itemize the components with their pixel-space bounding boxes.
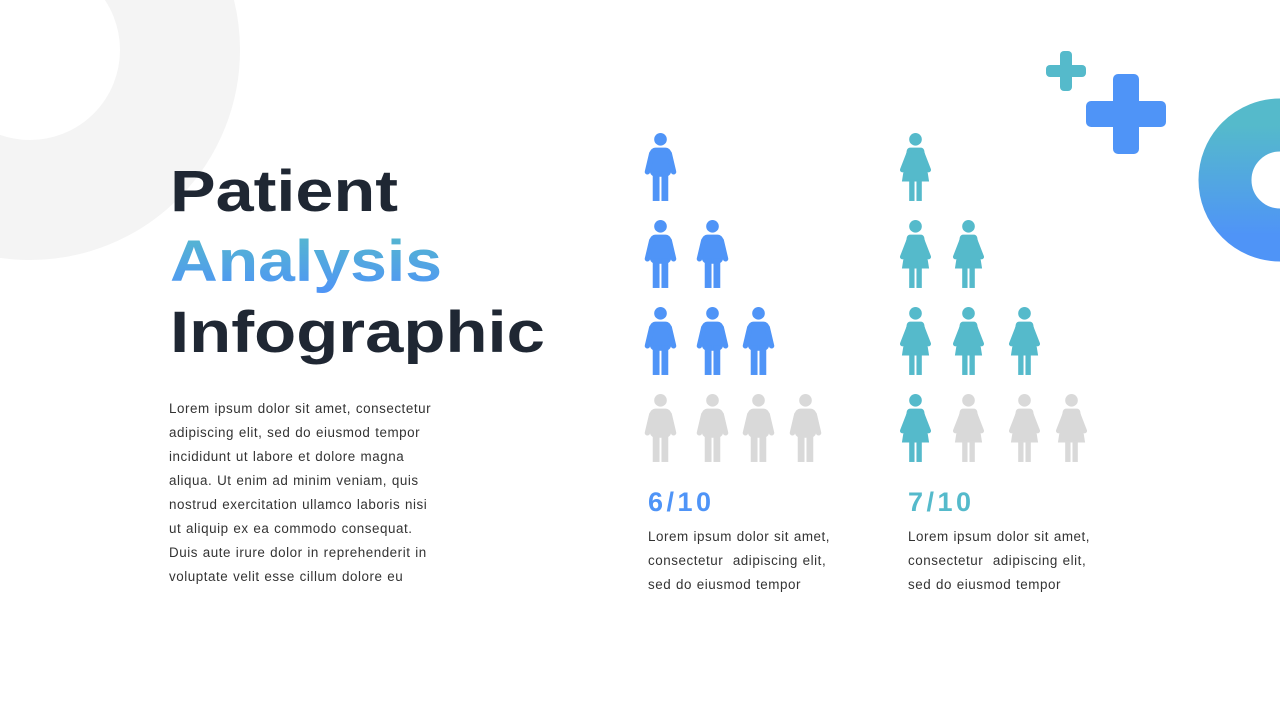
body text: nostrud exercitation ullamco laboris nisi [169, 497, 427, 512]
chart: female pictogram [900, 133, 1087, 462]
stat text right: consectetur adipiscing elit, [908, 553, 1086, 568]
stat text right [908, 529, 1090, 592]
stat: 6/10: 6/10 [648, 487, 715, 517]
body text: Duis aute irure dolor in reprehenderit in [169, 545, 427, 560]
stat text left: consectetur adipiscing elit, [648, 553, 826, 568]
title [170, 159, 545, 365]
chart: male pictogram [644, 133, 822, 462]
icon: small plus [1046, 51, 1086, 91]
title: Infographic [170, 300, 545, 365]
stat: 7/10: 7/10 [908, 487, 975, 517]
stat text right: Lorem ipsum dolor sit amet, [908, 529, 1090, 544]
title: Analysis [170, 229, 442, 294]
body text: Lorem ipsum dolor sit amet, consectetur [169, 401, 431, 416]
decoration: gradient ring right [1198, 98, 1280, 262]
body text: adipiscing elit, sed do eiusmod tempor [169, 425, 420, 440]
title: Patient [170, 159, 398, 224]
stat text left [648, 529, 830, 592]
icon: big plus [1086, 74, 1166, 154]
body text [169, 401, 431, 584]
body text: ut aliquip ex ea commodo consequat. [169, 521, 413, 536]
body text: incididunt ut labore et dolore magna [169, 449, 404, 464]
body text: voluptate velit esse cillum dolore eu [169, 569, 403, 584]
decorative gray ring top-left [0, 0, 240, 260]
stat text right: sed do eiusmod tempor [908, 577, 1061, 592]
stat text left: Lorem ipsum dolor sit amet, [648, 529, 830, 544]
body text: aliqua. Ut enim ad minim veniam, quis [169, 473, 419, 488]
stat text left: sed do eiusmod tempor [648, 577, 801, 592]
